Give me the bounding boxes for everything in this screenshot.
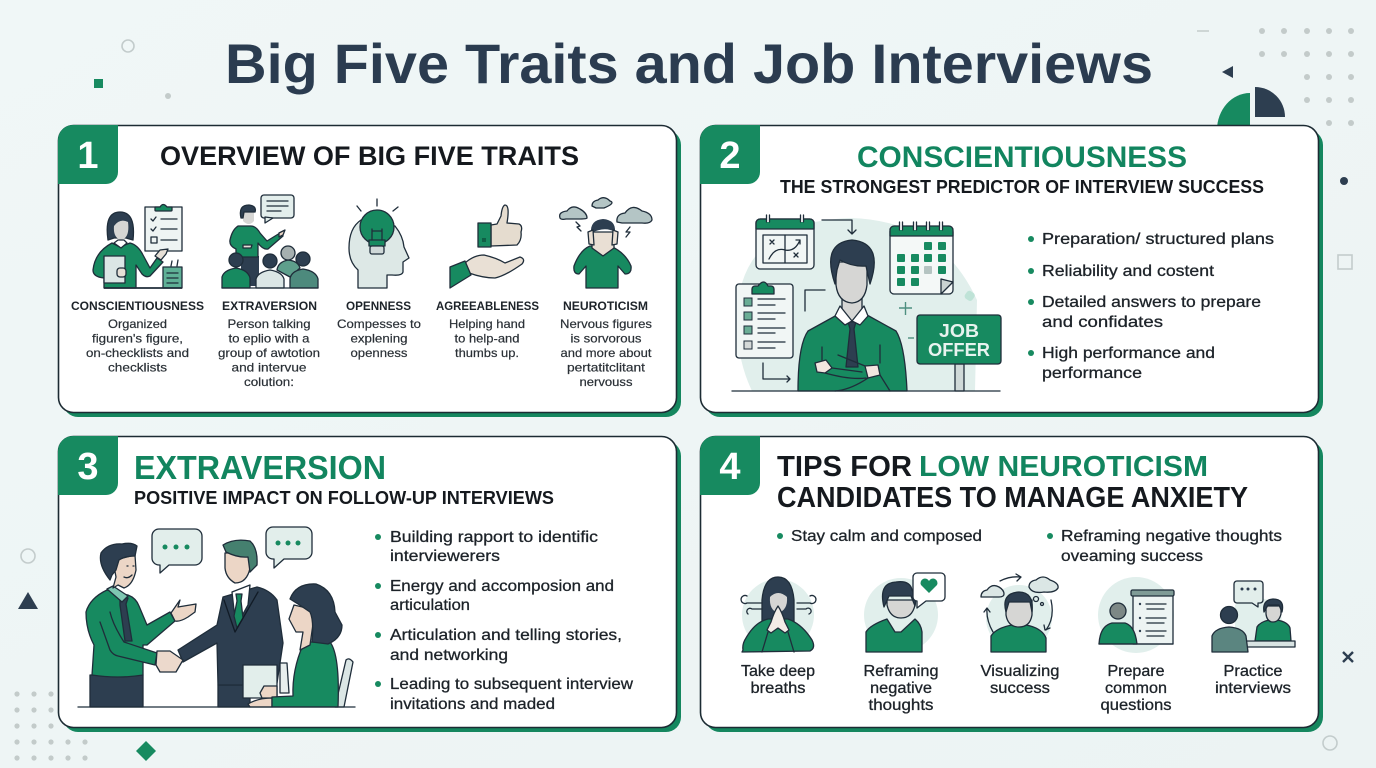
bullet list: extraversion: Energy and accomposion and: [390, 578, 614, 595]
illustration: handshake between candidate and interviewers: [78, 527, 355, 707]
number badge 1: 1: [77, 135, 99, 177]
heading: tips for low neuroticism candidates: [777, 451, 1248, 514]
panel: extraversion: [58, 436, 681, 732]
panel: conscientiousness: [700, 125, 1323, 417]
icon: extraversion presenter and audience: [222, 195, 318, 288]
title: Big Five Traits and Job Interviews: [225, 32, 1153, 95]
tip: reframing negative thoughts: negative: [870, 680, 932, 697]
number badge 1: [58, 125, 118, 184]
tip: prepare common questions: common: [1105, 680, 1167, 697]
heading: overview: OVERVIEW OF BIG FIVE TRAITS: [160, 141, 579, 171]
trait: agreeableness: to help-and: [454, 332, 520, 346]
panel: tips for low neuroticism: [700, 436, 1323, 732]
bullet list: conscientiousness: High performance and: [1042, 345, 1215, 362]
trait: extraversion: Person talking: [228, 317, 310, 331]
bullet: reframing: oveaming success: [1061, 548, 1203, 565]
trait: conscientiousness: checklists: [108, 360, 167, 374]
bullet list: conscientiousness: and confidates: [1042, 314, 1163, 331]
bullet list: extraversion: [375, 529, 633, 713]
trait: agreeableness: Helping hand: [449, 317, 525, 331]
subheading: positive impact: POSITIVE IMPACT ON FOLLOW-UP INTERVIEWS: [134, 488, 554, 508]
trait: extraversion: group of awtotion: [218, 346, 320, 360]
number badge 3: 3: [77, 446, 99, 488]
trait: extraversion: EXTRAVERSION: [222, 299, 317, 313]
tip: reframing negative thoughts: thoughts: [868, 697, 934, 714]
trait: conscientiousness: CONSCIENTIOUSNESS: [71, 299, 204, 313]
bullet list: extraversion: Leading to subsequent interview: [390, 676, 633, 693]
bullet list: conscientiousness: Preparation/ structured plans: [1042, 231, 1274, 248]
bullet list: conscientiousness: Reliability and costent: [1042, 263, 1215, 280]
number badge 2: [700, 125, 760, 184]
panel: overview of big five traits: [58, 125, 681, 417]
bullet list: conscientiousness: performance: [1042, 365, 1142, 382]
bullet list: extraversion: Articulation and telling stories,: [390, 627, 622, 644]
tip: prepare common questions: Prepare: [1108, 663, 1164, 680]
tip: take deep breaths: [741, 577, 816, 697]
trait: neuroticism: NEUROTICISM: [563, 299, 648, 313]
illustration: confident candidate with calendar, checklist and job offer sign: [732, 215, 1001, 391]
tip: visualizing success: [980, 574, 1060, 697]
bullet: reframing: [1047, 528, 1282, 565]
trait: neuroticism: nervouss: [580, 375, 632, 389]
trait: openness: openness: [350, 346, 408, 360]
tip: reframing negative thoughts: Reframing: [864, 663, 938, 680]
bullet list: extraversion: interviewerers: [390, 548, 500, 565]
heading: tips for low neuroticism candidates: CANDIDATES TO MANAGE ANXIETY: [777, 482, 1248, 514]
trait: openness: Compesses to: [337, 317, 421, 331]
trait: extraversion: colution:: [244, 375, 294, 389]
trait: agreeableness: thumbs up.: [455, 346, 519, 360]
trait: neuroticism: [560, 299, 652, 389]
trait: conscientiousness: figuren's figure,: [92, 332, 183, 346]
trait: openness: OPENNESS: [346, 299, 411, 313]
bullet list: conscientiousness: [1028, 231, 1274, 382]
icon: conscientiousness figure with checklist: [93, 204, 182, 288]
icon: openness head with light bulb: [349, 199, 409, 288]
icon: agreeableness hands: [450, 205, 524, 288]
trait: conscientiousness: on-checklists and: [86, 346, 189, 360]
subheading: strongest predictor: THE STRONGEST PREDICTOR OF INTERVIEW SUCCESS: [780, 177, 1264, 197]
tip: reframing negative thoughts: [864, 573, 945, 714]
trait: openness: [337, 299, 421, 360]
heading: tips for low neuroticism candidates: TIPS FOR: [777, 451, 912, 483]
trait: neuroticism: is sorvorous: [570, 332, 642, 346]
number badge 4: [700, 436, 760, 495]
trait: conscientiousness: Organized: [108, 317, 167, 331]
tip: prepare common questions: questions: [1100, 697, 1172, 714]
trait: agreeableness: AGREEABLENESS: [436, 299, 539, 313]
tip: prepare common questions: [1098, 577, 1174, 714]
tip: visualizing success: Visualizing: [980, 663, 1060, 680]
icon: neuroticism stressed figure with clouds: [560, 198, 652, 288]
bullet list: conscientiousness: Detailed answers to prepare: [1042, 294, 1261, 311]
bullet list: extraversion: articulation: [390, 597, 470, 614]
tip: take deep breaths: Take deep: [741, 663, 815, 680]
tip: practice interviews: [1212, 581, 1295, 697]
trait: openness: explening: [350, 332, 408, 346]
number badge 4: 4: [719, 446, 741, 488]
heading: extraversion: EXTRAVERSION: [134, 449, 386, 486]
trait: neuroticism: and more about: [560, 346, 652, 360]
number badge 2: 2: [719, 135, 741, 177]
tip: practice interviews: interviews: [1215, 680, 1291, 697]
heading: tips for low neuroticism candidates: LOW NEUROTICISM: [919, 451, 1208, 483]
number badge 3: [58, 436, 118, 495]
bullet: stay calm: Stay calm and composed: [791, 528, 982, 545]
bullet list: extraversion: and networking: [390, 647, 508, 664]
heading: conscientiousness: CONSCIENTIOUSNESS: [857, 141, 1187, 174]
bullet list: extraversion: invitations and maded: [390, 696, 555, 713]
bullet: reframing: Reframing negative thoughts: [1061, 528, 1282, 545]
trait: extraversion: to eplio with a: [228, 332, 310, 346]
bullet list: extraversion: Building rapport to identific: [390, 529, 598, 546]
illustration: confident candidate with calendar, checklist and job offer sign: JOB: [939, 320, 979, 341]
trait: extraversion: [218, 299, 320, 389]
tip: practice interviews: Practice: [1224, 663, 1282, 680]
trait: neuroticism: Nervous figures: [560, 317, 652, 331]
illustration: confident candidate with calendar, checklist and job offer sign: OFFER: [928, 339, 990, 360]
trait: extraversion: and intervue: [232, 360, 307, 374]
trait: conscientiousness: [71, 299, 204, 374]
tip: take deep breaths: breaths: [750, 680, 806, 697]
tip: visualizing success: success: [990, 680, 1050, 697]
trait: agreeableness: [436, 299, 539, 360]
trait: neuroticism: pertatitclitant: [567, 360, 646, 374]
